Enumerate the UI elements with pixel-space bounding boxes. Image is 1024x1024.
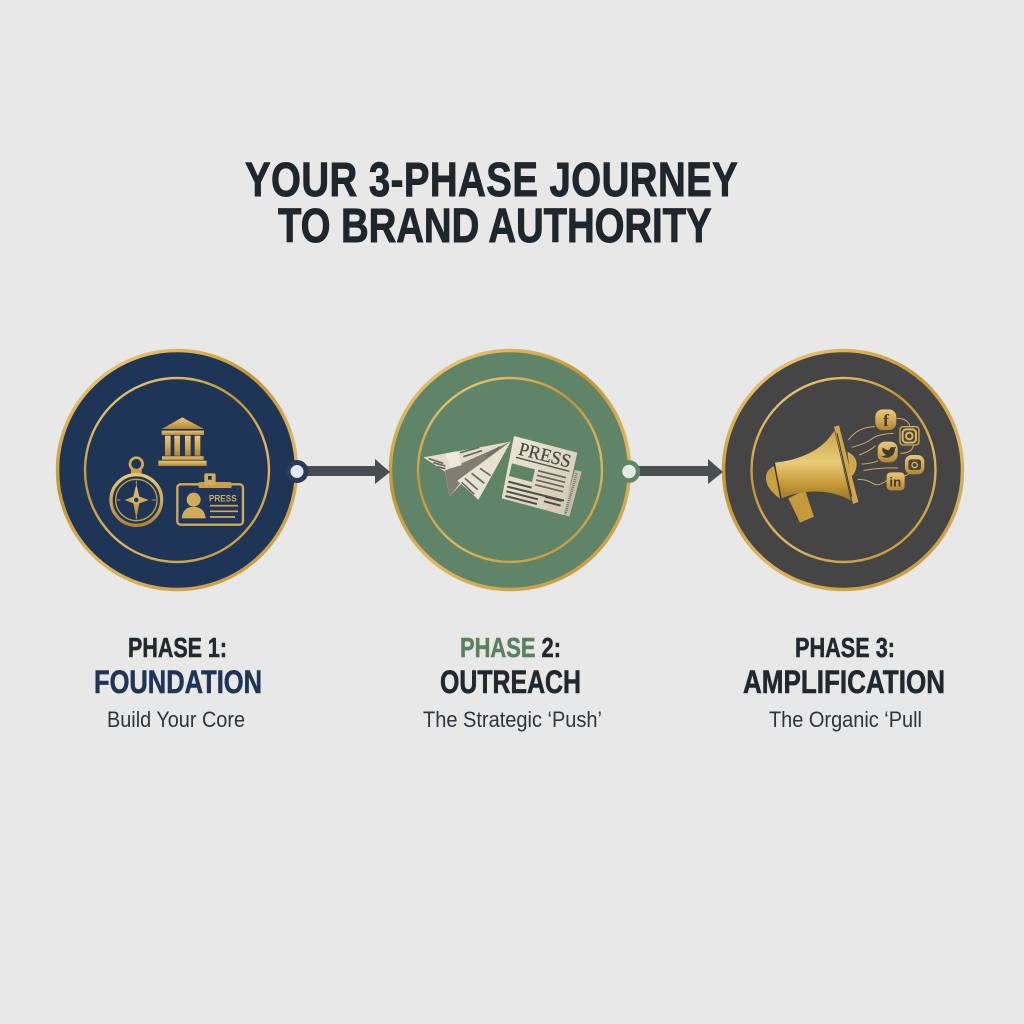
icons group	[766, 409, 924, 523]
phase 3 subtitle: The Organic ‘Pull	[769, 707, 922, 732]
phase 1 label: PHASE 1:	[128, 632, 227, 663]
icon: classical building	[158, 417, 207, 466]
phase 2 subtitle: The Strategic ‘Push’	[423, 707, 602, 732]
icon: camera badge	[905, 455, 924, 474]
icon: megaphone	[766, 425, 858, 523]
badge circle	[390, 350, 630, 590]
text block: phase 1	[94, 632, 262, 732]
phase 2 name: OUTREACH	[440, 664, 581, 700]
badge circle	[58, 350, 296, 590]
icon: linkedin badge	[887, 472, 905, 490]
icon: compass	[111, 458, 162, 525]
panel: phase 2 badge	[390, 350, 630, 590]
icon: sound waves	[848, 418, 914, 485]
connector arrow: phase 2 to phase 3	[620, 459, 723, 484]
connector arrow: phase 1 to phase 2	[288, 459, 390, 484]
inner ring	[418, 378, 602, 562]
newspaper headline: PRESS	[516, 439, 573, 473]
icons group	[111, 417, 243, 525]
inner ring	[85, 378, 269, 562]
panel: phase 1 badge	[58, 350, 296, 590]
icon: paper airplane	[423, 442, 511, 500]
icons group	[423, 436, 582, 517]
phase 3 label: PHASE 3:	[795, 632, 895, 663]
title	[245, 154, 738, 253]
badge circle	[724, 350, 962, 590]
text block: phase 2	[423, 632, 602, 732]
title: YOUR 3-PHASE JOURNEY	[245, 154, 738, 207]
icon: newspaper	[502, 436, 582, 517]
icon: linkedin badge: in	[889, 474, 901, 489]
phase 2 label: PHASE 2:	[460, 632, 561, 663]
phase 1 name: FOUNDATION	[94, 664, 262, 700]
title: TO BRAND AUTHORITY	[278, 200, 712, 253]
inner ring	[752, 378, 936, 562]
icon: twitter badge	[878, 442, 898, 462]
phase 1 subtitle: Build Your Core	[107, 707, 245, 732]
panel: phase 3 badge	[724, 350, 962, 590]
text block: phase 3	[743, 632, 945, 732]
icon: press ID card: PRESS	[209, 493, 237, 503]
icon: facebook badge	[875, 409, 896, 430]
icon: instagram badge	[900, 427, 919, 445]
phase 3 name: AMPLIFICATION	[743, 664, 945, 700]
icon: facebook badge: f	[883, 411, 889, 430]
